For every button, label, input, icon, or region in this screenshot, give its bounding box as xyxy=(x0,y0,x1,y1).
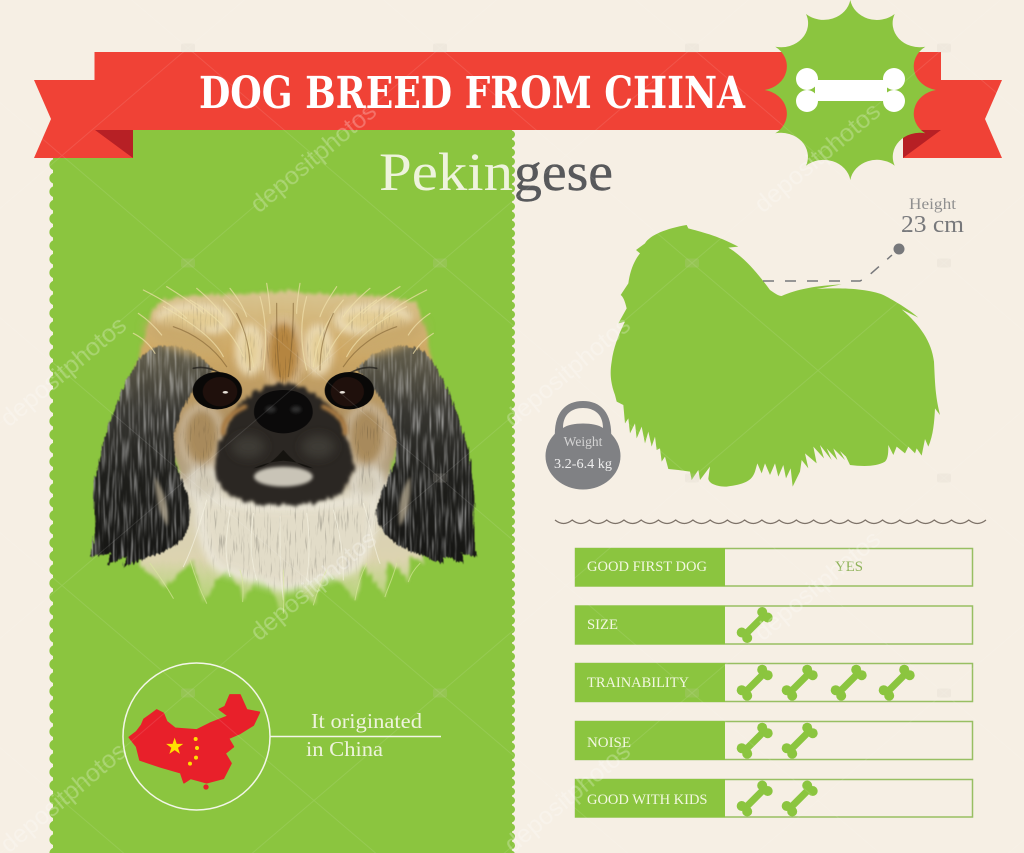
right ear xyxy=(357,346,477,563)
dashed leader line xyxy=(763,255,892,281)
panel: green portrait panel xyxy=(49,130,516,853)
row: noise xyxy=(575,721,972,760)
fur: forehead pale patches xyxy=(157,307,410,373)
flag stars xyxy=(166,737,199,766)
watermark: depositphotos xyxy=(245,97,382,219)
row: trainability xyxy=(575,663,972,702)
row: good first dog: YES xyxy=(835,559,863,575)
fur: chest and beard xyxy=(137,470,423,613)
left ear xyxy=(90,346,213,567)
title: Pekingese: Pekin xyxy=(379,142,513,202)
row: good first dog xyxy=(575,548,972,586)
row: size: SIZE xyxy=(587,617,618,633)
text: origin: in China xyxy=(306,737,384,761)
beard hair strands xyxy=(150,500,420,613)
leader dot xyxy=(894,244,904,254)
ribbon banner xyxy=(34,52,1002,158)
row: trainability: TRAINABILITY xyxy=(587,675,689,691)
weight label: Weight xyxy=(564,434,603,449)
fur: cheeks xyxy=(182,407,387,500)
muzzle xyxy=(215,383,353,505)
fur: head and forehead xyxy=(135,291,433,490)
table: breed ratings xyxy=(575,548,972,818)
illustration: Pekingese dog face xyxy=(90,283,477,613)
row: good first dog: GOOD FIRST DOG xyxy=(587,559,707,575)
icon: white bone xyxy=(796,68,905,112)
row: size xyxy=(575,606,972,644)
watermark: depositphotos xyxy=(749,525,886,647)
badge: starburst with bone xyxy=(765,0,936,180)
chin xyxy=(254,467,313,487)
fur: head texture group xyxy=(143,300,427,590)
icon: bone ratings 2 xyxy=(737,780,818,816)
circle outline xyxy=(123,663,270,810)
right eye xyxy=(325,372,374,409)
ribbon left fold xyxy=(95,130,133,158)
icon: kettlebell weight xyxy=(546,401,620,490)
map: China in circle xyxy=(123,663,441,810)
ribbon main band xyxy=(94,52,941,130)
muzzle grey fur xyxy=(232,435,335,458)
mouth xyxy=(253,450,313,468)
ear inner pale hair xyxy=(155,477,410,527)
icon: bone ratings 2 xyxy=(737,723,818,759)
ribbon left tail xyxy=(34,80,133,158)
fur: chest panel xyxy=(199,493,374,590)
text: origin: It originated xyxy=(311,709,423,733)
text: origin xyxy=(306,709,423,761)
weight value: 3.2-6.4 kg xyxy=(554,456,612,471)
title: Pekingese: gese xyxy=(514,142,613,202)
wavy divider xyxy=(555,520,986,524)
ear top blend into head xyxy=(141,314,429,363)
heading: dog breed from china: DOG BREED FROM CHINA xyxy=(199,68,746,119)
watermark: depositphotos xyxy=(499,311,636,433)
height label: Height xyxy=(909,196,957,213)
watermark: depositphotos xyxy=(245,525,382,647)
icon: bone rating 1 xyxy=(737,607,773,643)
icon: bone ratings 4 xyxy=(737,665,915,701)
nose xyxy=(254,390,313,433)
watermark: depositphotos xyxy=(749,97,886,219)
muzzle brown sides xyxy=(223,407,345,433)
ribbon right fold xyxy=(903,130,941,158)
row: good with kids xyxy=(575,779,972,818)
ribbon right tail xyxy=(903,80,1002,158)
row: noise: NOISE xyxy=(587,735,631,751)
connector line xyxy=(270,736,441,738)
silhouette: dog body xyxy=(611,225,940,487)
forehead hair strands xyxy=(133,283,433,387)
callout: height xyxy=(763,196,964,281)
China map shape xyxy=(129,695,259,790)
row: good with kids: GOOD WITH KIDS xyxy=(587,792,708,808)
left eye xyxy=(193,372,242,409)
fur: forehead centre stripe xyxy=(265,320,302,387)
height value: 23 cm xyxy=(901,212,964,238)
title: Pekingese xyxy=(379,142,613,202)
